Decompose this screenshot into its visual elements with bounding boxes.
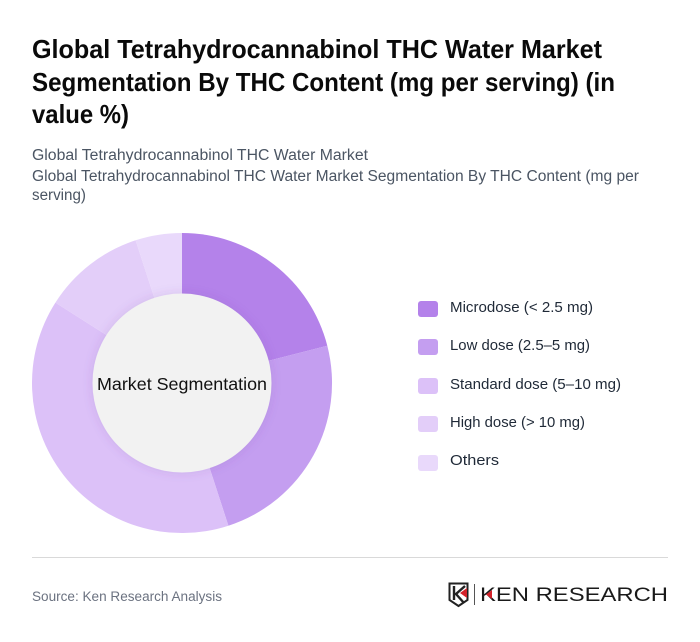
donut chart [32, 233, 332, 533]
legend item: others [418, 453, 499, 471]
logo red accent [486, 590, 492, 599]
donut centre [92, 294, 272, 472]
title [32, 34, 615, 129]
subtitle: serving) [32, 187, 86, 204]
segment: low dose [182, 346, 332, 526]
segment: microdose [182, 233, 327, 383]
logo wordmark: KEN RESEARCH [480, 584, 668, 606]
segment: others [136, 233, 182, 383]
subtitle [32, 147, 639, 204]
legend item: low dose: Low dose (2.5–5 mg) [450, 337, 590, 354]
legend item: standard dose: Standard dose (5–10 mg) [450, 376, 621, 393]
title: Segmentation By THC Content (mg per serving) (in [32, 67, 615, 97]
legend item: others: Others [450, 453, 499, 469]
title: value %) [32, 99, 129, 129]
subtitle: Global Tetrahydrocannabinol THC Water Market Segmentation By THC Content (mg per [32, 168, 639, 185]
legend item: high dose: High dose (> 10 mg) [450, 414, 585, 431]
source note: Source: Ken Research Analysis [32, 589, 222, 604]
legend item: microdose: Microdose (< 2.5 mg) [450, 299, 593, 316]
centre label: Market Segmentation [97, 374, 267, 394]
subtitle: Global Tetrahydrocannabinol THC Water Market [32, 147, 369, 164]
segment: standard dose [32, 303, 228, 533]
logo: Ken Research [450, 584, 668, 606]
segment: high dose [55, 240, 182, 383]
logo icon [450, 584, 468, 606]
title: Global Tetrahydrocannabinol THC Water Market [32, 34, 602, 64]
legend [418, 299, 621, 471]
